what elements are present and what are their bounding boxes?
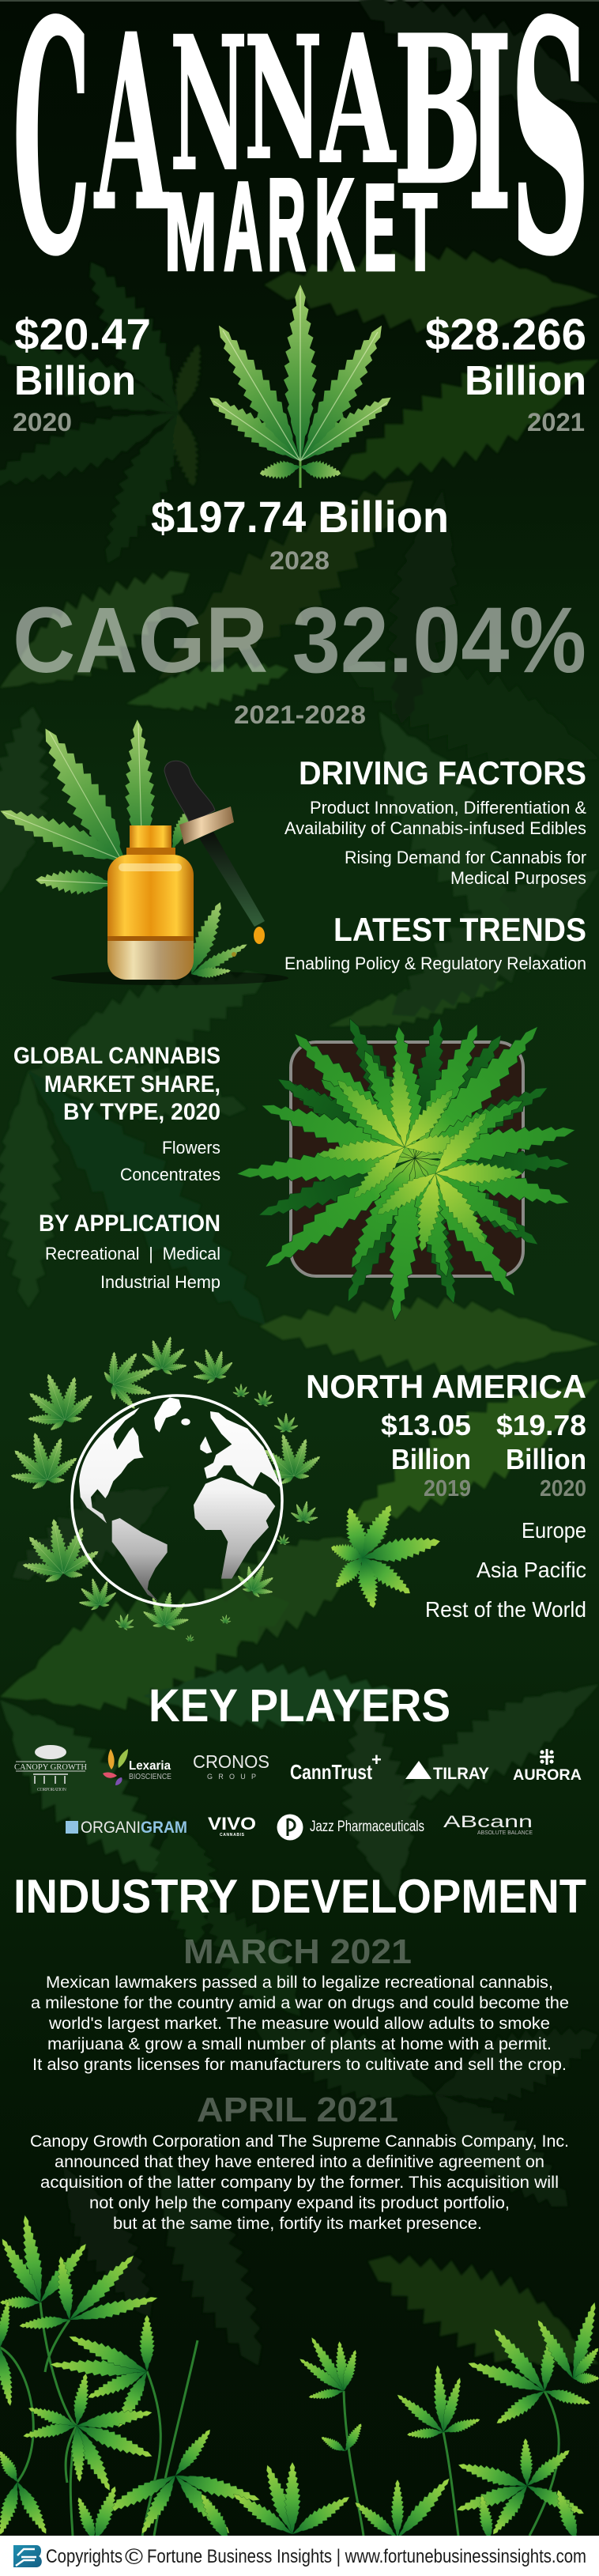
factor: medical demand <box>345 848 586 888</box>
leaf cluster F <box>0 2300 53 2537</box>
panel: by application: Industrial Hemp <box>100 1272 220 1292</box>
stat: North America 2020: Billion <box>506 1443 586 1475</box>
logo: Organigram: ORGANI <box>81 1819 141 1837</box>
text block: March 2021: world's largest market. The measure would allow adults to smoke <box>48 2015 550 2033</box>
logo: CannTrust: CannTrust <box>290 1760 372 1784</box>
text block: April 2021: announced that they have entered into a definitive agreement on <box>55 2153 544 2171</box>
logo: Canopy Growth: CANOPY GROWTH <box>14 1762 87 1772</box>
leaf cluster K <box>454 2438 587 2539</box>
stat: 2021 market size: Billion <box>465 358 586 404</box>
title word: Market: E <box>364 160 396 297</box>
stat: 2028 market size: 2028 <box>269 546 330 575</box>
logo: Tilray <box>405 1761 489 1783</box>
logo: Canopy Growth: CORPORATION <box>37 1788 67 1792</box>
panel: by application: Recreational | Medical <box>45 1244 220 1263</box>
panel: driving factors <box>284 754 586 888</box>
title word: Market: K <box>315 151 355 297</box>
leaf cluster G <box>296 2334 366 2455</box>
panel: market share by type: GLOBAL CANNABIS <box>13 1043 220 1069</box>
panel: by application: BY APPLICATION <box>39 1211 220 1237</box>
panel: North America <box>306 1368 586 1622</box>
text block: April 2021: Canopy Growth Corporation and The Supreme Cannabis Company, Inc. <box>30 2132 569 2151</box>
stat: North America 2019: 2019 <box>424 1476 471 1501</box>
list: other regions <box>425 1518 586 1622</box>
logo: CannTrust <box>290 1750 382 1784</box>
panel: latest trends: LATEST TRENDS <box>333 911 586 948</box>
panel: latest trends <box>284 911 586 973</box>
text block: March 2021 <box>31 1974 569 2074</box>
text block: March 2021: Mexican lawmakers passed a bill to legalize recreational cannabis, <box>46 1974 553 1992</box>
factor: medical demand: Rising Demand for Cannabis for <box>345 848 586 867</box>
leaf cluster M <box>351 2473 455 2543</box>
icon: cannabis leaf <box>202 285 398 488</box>
list: other regions: Rest of the World <box>425 1597 586 1622</box>
panel: North America: NORTH AMERICA <box>306 1368 586 1405</box>
title word: Market: R <box>267 152 306 297</box>
list: other regions: Europe <box>522 1518 586 1543</box>
text block: March 2021: marijuana & grow a small number of plants at home with a permit. <box>47 2035 552 2053</box>
text block: April 2021: but at the same time, fortify its market presence. <box>113 2215 482 2233</box>
logos: key players <box>14 1745 582 1841</box>
text: copyright line <box>46 2544 586 2569</box>
logo: Jazz Pharmaceuticals <box>277 1814 424 1841</box>
illustration: globe ringed with leaves <box>0 1330 326 1642</box>
text block: April 2021: acquisition of the latter company by the former. This acquisition will <box>40 2174 559 2192</box>
leaf cluster N <box>73 2483 584 2546</box>
illustration: potted cannabis plant <box>235 1013 578 1323</box>
logo: Aurora: AURORA <box>513 1767 582 1784</box>
logo: Lexaria Bioscience: BIOSCIENCE <box>129 1773 171 1781</box>
text block: March 2021: a milestone for the country amid a war on drugs and could become the <box>31 1994 569 2012</box>
heading: driving factors: DRIVING FACTORS <box>299 754 586 791</box>
stat: CAGR: 2021-2028 <box>234 701 366 729</box>
stat: North America 2019 <box>381 1409 471 1501</box>
text block: April 2021 <box>30 2132 569 2233</box>
panel: market share by type: MARKET SHARE, <box>44 1071 220 1097</box>
stat: 2021 market size <box>425 309 586 436</box>
panel: market share by type <box>13 1043 220 1184</box>
text block: March 2021: It also grants licenses for manufacturers to cultivate and sell the crop. <box>32 2056 567 2074</box>
logo: Cronos Group: GROUP <box>207 1773 256 1781</box>
stat: 2020 market size <box>13 309 151 436</box>
panel: April 2021 development <box>30 2091 569 2233</box>
logo: ABcann: ABSOLUTE BALANCE <box>477 1830 533 1836</box>
title: Cannabis Market <box>13 0 590 325</box>
footer: copyright bar <box>0 2536 599 2576</box>
stat: North America 2020: 2020 <box>540 1476 586 1501</box>
text block: April 2021: not only help the company expand its product portfolio, <box>89 2194 510 2212</box>
stat: North America 2019: $13.05 <box>381 1409 471 1441</box>
logo: Vivo Cannabis: VIVO <box>208 1814 256 1834</box>
stat: 2028 market size: $197.74 Billion <box>151 492 449 542</box>
leaf cluster A <box>0 2214 92 2309</box>
logo: Organigram <box>66 1819 187 1837</box>
logo: Cronos Group: CRONOS <box>193 1751 269 1772</box>
text: copyright line: © <box>125 2544 143 2569</box>
logo: Fortune Business Insights <box>13 2545 42 2567</box>
leaf cluster L <box>229 2462 353 2540</box>
heading: key players: KEY PLAYERS <box>149 1680 450 1732</box>
logo: Vivo Cannabis: CANNABIS <box>220 1833 245 1838</box>
logo: ABcann: ABcann <box>443 1813 533 1831</box>
logo: Organigram: GRAM <box>141 1819 187 1837</box>
panel: March 2021 development <box>31 1932 569 2074</box>
logo: CannTrust: + <box>371 1750 382 1770</box>
stat: 2020 market size: 2020 <box>13 408 72 436</box>
leaf cluster D <box>22 2372 156 2495</box>
stat: North America 2020 <box>496 1409 586 1501</box>
title word: Market: A <box>224 156 262 297</box>
logo: Tilray: TILRAY <box>433 1765 489 1783</box>
leaf cluster H <box>394 2365 482 2440</box>
leaf cluster E <box>99 2425 262 2540</box>
logo: Lexaria Bioscience <box>103 1749 171 1785</box>
panel: March 2021 development: MARCH 2021 <box>183 1932 412 1971</box>
factor: product innovation: Product Innovation, Differentiation & <box>310 798 586 818</box>
logo: Aurora <box>513 1749 582 1784</box>
title word: Cannabis: N <box>170 0 247 212</box>
panel: latest trends: Enabling Policy & Regulatory Relaxation <box>284 954 586 973</box>
leaf cluster B <box>18 2249 160 2332</box>
stat: North America 2020: $19.78 <box>496 1409 586 1441</box>
stat: North America 2019: Billion <box>391 1443 471 1475</box>
illustration: oil bottle with dropper and leaves <box>0 719 288 985</box>
title word: Cannabis <box>13 0 590 325</box>
panel: by application <box>39 1211 220 1292</box>
logo: Lexaria Bioscience: Lexaria <box>129 1759 171 1773</box>
panel: April 2021 development: APRIL 2021 <box>197 2091 398 2129</box>
stat: 2020 market size: Billion <box>14 358 136 404</box>
factor: product innovation: Availability of Cannabis-infused Edibles <box>284 818 586 838</box>
panel: market share by type: BY TYPE, 2020 <box>63 1099 220 1125</box>
title word: Cannabis: N <box>244 0 322 197</box>
title word: Cannabis: A <box>320 0 396 203</box>
text: copyright line: Copyrights <box>46 2546 122 2567</box>
title word: Market: T <box>403 172 437 293</box>
leaf cluster J <box>532 2300 599 2385</box>
icon: bright cannabis leaf <box>329 1501 443 1610</box>
list: other regions: Asia Pacific <box>477 1558 586 1582</box>
leaf cluster I <box>465 2324 592 2430</box>
logo: Jazz Pharmaceuticals: Jazz Pharmaceuticals <box>310 1819 424 1835</box>
title word: Market <box>164 151 437 297</box>
stat: 2028 market size <box>151 492 449 575</box>
leaf cluster C <box>50 2315 155 2431</box>
factor: medical demand: Medical Purposes <box>450 868 586 888</box>
stat: 2021 market size: $28.266 <box>425 309 586 359</box>
factor: product innovation <box>284 798 586 838</box>
logo: Canopy Growth <box>14 1745 87 1792</box>
panel: market share by type: Concentrates <box>120 1165 220 1184</box>
panel: market share by type: Flowers <box>162 1138 220 1158</box>
title word: Market: M <box>164 171 217 294</box>
logo: Cronos Group <box>193 1751 269 1781</box>
logo: ABcann <box>443 1813 533 1836</box>
stat: 2020 market size: $20.47 <box>14 309 151 359</box>
illustration: cannabis plants along the bottom <box>0 2214 599 2546</box>
stat: 2021 market size: 2021 <box>527 408 585 436</box>
